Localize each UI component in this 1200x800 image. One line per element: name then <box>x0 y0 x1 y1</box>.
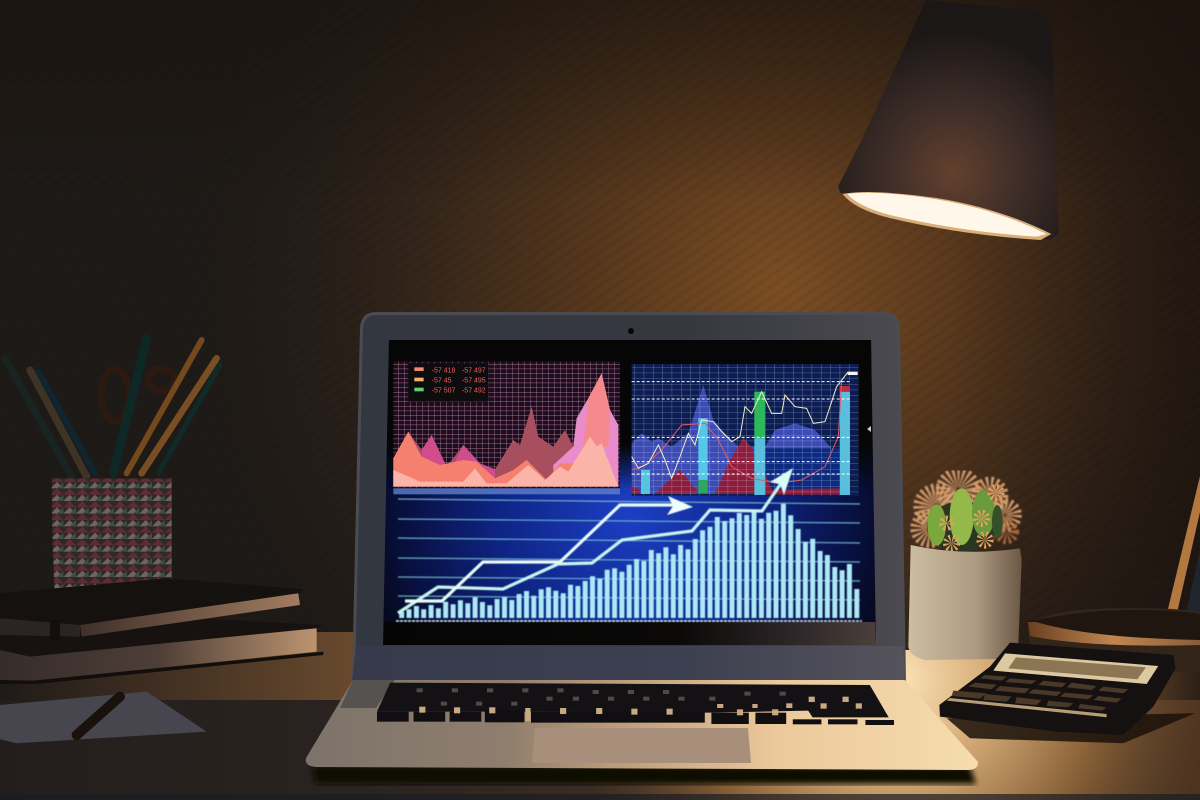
laptop bezel <box>355 315 904 680</box>
desk surface <box>0 632 1200 800</box>
chart: blue mixed chart <box>632 364 858 496</box>
screen top margin <box>386 340 873 490</box>
blue area <box>632 385 838 494</box>
top book <box>0 578 303 640</box>
red curve <box>632 372 848 483</box>
cyan and green bars <box>641 372 858 495</box>
axis labels <box>393 488 620 494</box>
legend: -57 497 <box>462 367 486 374</box>
scissors <box>101 369 176 421</box>
keys <box>952 675 1128 711</box>
trackpad <box>532 728 751 763</box>
pen <box>77 697 120 735</box>
pale price line <box>632 372 848 478</box>
salmon peak <box>583 373 610 447</box>
key highlights <box>419 697 862 721</box>
pencil holder with pencils and scissors <box>5 338 220 601</box>
calculator edge strip <box>947 698 1107 717</box>
growth line one <box>398 468 793 613</box>
pencils <box>5 338 220 477</box>
pot <box>908 545 1022 660</box>
dashed guides <box>632 382 852 474</box>
calculator <box>939 643 1195 743</box>
front area <box>393 437 618 487</box>
back area <box>393 373 618 487</box>
cactus body <box>927 488 1003 552</box>
legend: -57 495 <box>462 377 486 384</box>
bottom book <box>0 617 323 684</box>
magenta areas <box>422 435 495 482</box>
growth line two <box>405 496 693 601</box>
pink right area <box>553 373 618 487</box>
lamp shade <box>838 0 1059 241</box>
display <box>1008 657 1146 679</box>
lamp stand <box>1028 476 1200 672</box>
red areas <box>632 437 840 495</box>
legend: -57 507 <box>432 388 455 395</box>
display frame <box>993 653 1158 684</box>
screen reflection <box>383 622 876 645</box>
webcam <box>628 328 634 334</box>
lamp light opening <box>843 192 1051 240</box>
side marker <box>867 426 871 432</box>
cactus in pot <box>908 477 1022 660</box>
cactus spines <box>918 477 1014 543</box>
laptop base <box>306 680 978 770</box>
holder <box>52 478 172 601</box>
laptop <box>306 312 978 770</box>
axis <box>396 620 862 622</box>
grid lines <box>398 499 860 600</box>
legend: -57 492 <box>462 388 486 395</box>
legend <box>408 363 488 402</box>
calculator shadow <box>947 713 1195 743</box>
screen <box>383 340 876 645</box>
note paper <box>0 692 207 743</box>
calculator body <box>939 643 1176 735</box>
legend: -57 418 <box>432 367 455 374</box>
stacked notebooks <box>0 578 323 743</box>
legend: -57 45 <box>432 377 452 384</box>
laptop lid <box>352 312 906 682</box>
cactus flowers <box>943 488 1000 548</box>
key legends <box>417 688 786 706</box>
middle area <box>393 432 573 487</box>
chart: pink area chart <box>393 362 620 494</box>
keyboard <box>377 683 894 725</box>
bars <box>402 504 857 618</box>
chart: bars with growth arrows <box>396 468 862 621</box>
